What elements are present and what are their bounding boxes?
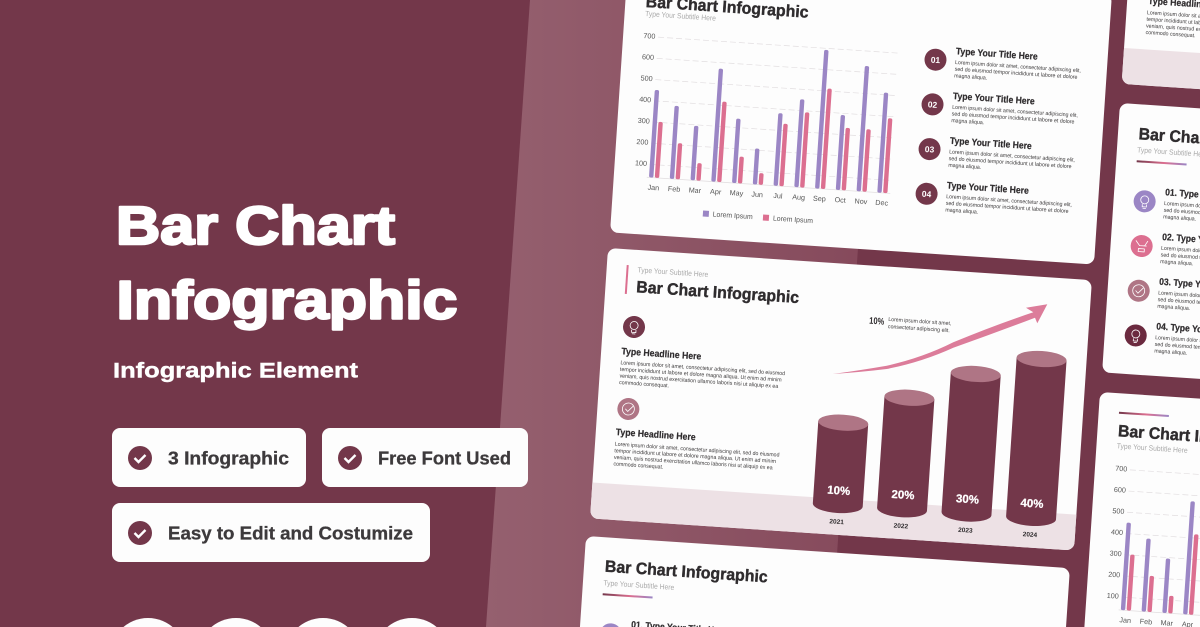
feature badge: 3 Infographic: 3 Infographic xyxy=(168,448,289,468)
text block: headline: commodo consequat. xyxy=(1145,30,1196,39)
list item 01: 01 xyxy=(930,55,941,65)
text block: headline 1 xyxy=(619,346,786,397)
text block: headline 2: veniam, quis nostrud exercitation ullamco laboris nisi ut aliquip ex ea xyxy=(614,455,774,471)
feature badge: Free Font Used: Free Font Used xyxy=(378,448,511,468)
bar chart: May xyxy=(729,188,744,198)
list item 02: 02 xyxy=(927,99,938,110)
subheading: Type Your Subtitle Here xyxy=(603,578,675,592)
gradient divider xyxy=(603,593,653,599)
icon: light bulb xyxy=(622,315,646,339)
cylinder bar 2021: 2021 xyxy=(829,518,844,526)
heading accent bar xyxy=(625,265,629,294)
legend xyxy=(703,209,813,225)
list item 03: sed do eiusmod tempor incididunt ut labore et dolore xyxy=(949,156,1072,170)
panel: upper right cylinder slide xyxy=(1122,0,1200,116)
bar chart: 100 xyxy=(635,158,647,168)
bar chart: 200 xyxy=(1108,570,1121,579)
legend: Lorem Ipsum xyxy=(773,213,813,225)
text block: headline 1: Type Headline Here xyxy=(621,346,702,363)
bar chart: 400 xyxy=(1111,527,1123,537)
text block: headline 2: commodo consequat. xyxy=(613,461,664,471)
text block: headline xyxy=(1145,0,1200,47)
text block: headline 1: veniam, quis nostrud exercitation ullamco laboris nisi ut aliquip ex ea xyxy=(619,373,779,390)
text block: headline 2 xyxy=(613,427,781,478)
subheading: Type Your Subtitle Here xyxy=(637,265,709,279)
callout: 10%: consectetur adipiscing elit. xyxy=(888,324,950,334)
list item 01: Type Your Title Here xyxy=(956,46,1038,63)
list item 03: Type Your Title Here xyxy=(950,136,1032,152)
text block: headline 2: Type Headline Here xyxy=(615,427,696,443)
list item 01: sed do eiusmod tempor incididunt ut labore et dolore xyxy=(954,67,1078,81)
bar chart: Nov xyxy=(854,196,868,206)
cylinder bar 2024: 40% xyxy=(1020,497,1044,511)
bar chart: Jan xyxy=(1119,615,1131,625)
feature badge: 3 Infographic xyxy=(112,428,306,487)
bar chart: Jun xyxy=(751,189,763,199)
list item 02: Lorem ipsum dolor sit amet, consectetur adipiscing elit, xyxy=(952,105,1079,119)
list item 04: 04 xyxy=(922,189,932,199)
list item 04 xyxy=(914,178,1073,222)
bar chart: Sep xyxy=(813,194,826,203)
list item 03: Lorem ipsum dolor sit amet, consectetur adipiscing elit, xyxy=(949,149,1076,164)
bar chart: Apr xyxy=(710,187,722,197)
list item 02: magna aliqua. xyxy=(1160,259,1194,267)
bar chart: 700 xyxy=(1115,464,1128,473)
gradient divider xyxy=(1119,412,1169,417)
callout: 10%: Lorem ipsum dolor sit amet, xyxy=(888,317,952,327)
title xyxy=(116,196,458,330)
bar chart: 600 xyxy=(642,52,654,62)
bar chart: 100 xyxy=(1107,591,1119,601)
bar chart: 500 xyxy=(640,73,653,83)
arrow: growth trend xyxy=(833,304,1047,374)
bar chart: Aug xyxy=(792,192,805,202)
list item 02: magna aliqua. xyxy=(951,118,985,126)
panel: cylinder bar slide xyxy=(590,248,1092,551)
bar chart: 400 xyxy=(639,95,652,104)
heading: Bar Chart Infographic xyxy=(636,278,800,307)
list item 03: magna aliqua. xyxy=(948,163,982,171)
text block: headline 2: Lorem ipsum dolor sit amet, consectetur adipiscing elit, sed do eiusmod xyxy=(615,442,780,459)
list item 01: magna aliqua. xyxy=(1163,214,1197,223)
list item 03: magna aliqua. xyxy=(1157,304,1191,312)
list item 04: magna aliqua. xyxy=(1154,349,1188,357)
list item 03 xyxy=(917,134,1076,177)
callout: 10%: 10% xyxy=(869,316,885,328)
text block: headline 1: tempor incididunt ut labore et dolore magna aliqua. Ut enim ad minim xyxy=(620,367,782,384)
bar chart: 300 xyxy=(1109,549,1122,558)
feature badge: Easy to Edit and Costumize xyxy=(112,503,430,562)
cylinder bar 2022: 20% xyxy=(891,489,915,502)
software icon circles xyxy=(110,618,450,627)
list item 04: Type Your Title Here xyxy=(947,180,1029,197)
bar chart: Jul xyxy=(773,191,783,201)
bar chart: Mar xyxy=(688,185,702,195)
text block: headline 1: Lorem ipsum dolor sit amet, consectetur adipiscing elit, sed do eiusmod xyxy=(620,360,785,377)
heading: Bar Chart Infographic xyxy=(604,558,768,586)
panel: lower right bar chart slide xyxy=(1082,392,1200,627)
cylinder bar 2023 xyxy=(940,364,1001,536)
callout: 10% xyxy=(869,316,952,334)
title: Infographic xyxy=(116,270,458,330)
cylinder bar 2022 xyxy=(876,388,935,532)
list item 01 xyxy=(1132,185,1200,229)
title: Bar Chart xyxy=(116,196,395,256)
list item 03 xyxy=(1127,275,1200,318)
list item 01 xyxy=(599,618,727,627)
subheading: Type Your Subtitle Here xyxy=(645,9,716,23)
list item 02 xyxy=(1130,230,1200,273)
feature badge: Free Font Used xyxy=(322,428,528,487)
gradient divider xyxy=(1137,160,1187,166)
bar chart: Oct xyxy=(834,195,846,205)
icon: check xyxy=(617,397,640,421)
subtitle: Infographic Element xyxy=(113,360,358,383)
panel: right list slide xyxy=(1102,103,1200,405)
list item 01 xyxy=(923,44,1082,88)
cylinder bar 2024 xyxy=(1005,349,1067,540)
feature badge: Easy to Edit and Costumize: Easy to Edit and Costumize xyxy=(168,523,413,543)
list item 04 xyxy=(1124,319,1200,363)
text block: headline 1: commodo consequat. xyxy=(619,380,670,389)
list item 02 xyxy=(920,89,1079,132)
cylinder bar 2023: 2023 xyxy=(958,527,973,535)
legend: Lorem Ipsum xyxy=(712,209,753,221)
cylinder bar 2021 xyxy=(811,413,869,527)
bar chart xyxy=(633,31,900,208)
subheading: Type Your Subtitle Here xyxy=(1116,441,1188,455)
bar chart: Feb xyxy=(668,184,681,194)
bar chart: 600 xyxy=(1114,485,1126,495)
list item 02: sed do eiusmod tempor incididunt ut labore et dolore xyxy=(952,111,1075,126)
list item 03: 03 xyxy=(924,144,935,155)
bar chart: 200 xyxy=(636,137,649,147)
bar chart xyxy=(1105,464,1200,627)
bar chart: Feb xyxy=(1140,617,1152,626)
bar chart: 500 xyxy=(1112,506,1125,516)
panel: top bar chart slide xyxy=(610,0,1112,265)
bar chart: Dec xyxy=(875,198,889,208)
cylinder bar 2023: 30% xyxy=(956,493,979,507)
bar chart: 700 xyxy=(643,31,656,41)
cylinder bar 2022: 2022 xyxy=(893,523,909,531)
panel: bottom list slide xyxy=(568,536,1070,627)
bar chart: 300 xyxy=(638,116,650,126)
cylinder bar 2024: 2024 xyxy=(1022,531,1038,539)
list item 02: Type Your Title Here xyxy=(953,91,1035,107)
cylinder bar 2021: 10% xyxy=(827,485,851,498)
text block: headline 2: tempor incididunt ut labore et dolore magna aliqua. Ut enim ad minim xyxy=(614,448,777,465)
list item 04: magna aliqua. xyxy=(945,207,979,216)
bar chart: Jan xyxy=(647,183,659,192)
list item 01: Lorem ipsum dolor sit amet, consectetur adipiscing elit, xyxy=(955,60,1081,74)
list item 01: magna aliqua. xyxy=(954,73,988,82)
list item 04: Lorem ipsum dolor sit amet, consectetur adipiscing elit, xyxy=(946,194,1073,208)
list item 04: sed do eiusmod tempor incididunt ut labore et dolore xyxy=(946,201,1069,215)
